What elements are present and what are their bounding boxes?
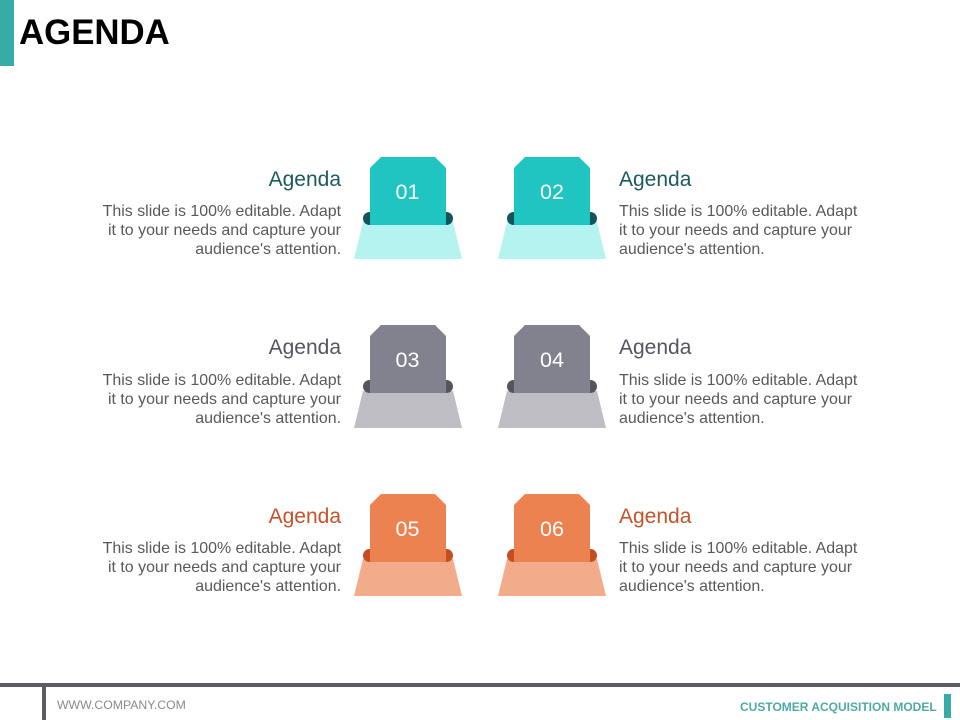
item 06 text: Agenda bbox=[619, 505, 692, 528]
item 03 text: it to your needs and capture your bbox=[108, 391, 342, 408]
footer deck name: CUSTOMER ACQUISITION MODEL bbox=[740, 700, 937, 714]
item 02 text: it to your needs and capture your bbox=[619, 222, 853, 239]
item 03 icon bbox=[354, 325, 462, 428]
item 03 text: Agenda bbox=[269, 336, 341, 359]
item 06 icon: 06 bbox=[540, 517, 564, 541]
item 01 icon: 01 bbox=[396, 180, 419, 204]
item 02 text: audience's attention. bbox=[619, 241, 765, 258]
item 04 text: it to your needs and capture your bbox=[619, 391, 853, 408]
item 01 text bbox=[103, 168, 342, 258]
item 06 icon bbox=[498, 494, 606, 596]
item 01 text: Agenda bbox=[269, 168, 341, 191]
item 03 text: This slide is 100% editable. Adapt bbox=[103, 372, 342, 389]
item 01 text: it to your needs and capture your bbox=[108, 222, 342, 239]
item 05 text: This slide is 100% editable. Adapt bbox=[103, 540, 342, 557]
footer left tick bbox=[42, 687, 46, 720]
item 04 text: Agenda bbox=[619, 336, 692, 359]
title: AGENDA bbox=[19, 13, 170, 52]
item 06 text: This slide is 100% editable. Adapt bbox=[619, 540, 858, 557]
item 04 icon: 04 bbox=[540, 348, 564, 372]
item 01 icon bbox=[354, 157, 462, 259]
item 04 icon bbox=[498, 325, 606, 428]
footer right accent bbox=[944, 694, 951, 718]
item 03 text bbox=[103, 336, 342, 427]
title accent bar bbox=[0, 0, 14, 66]
item 05 text: Agenda bbox=[269, 505, 341, 528]
item 05 icon: 05 bbox=[396, 517, 419, 541]
item 02 text: Agenda bbox=[619, 168, 692, 191]
item 03 text: audience's attention. bbox=[195, 410, 341, 427]
item 03 icon: 03 bbox=[396, 348, 419, 372]
footer rule bbox=[0, 683, 960, 687]
item 02 text bbox=[619, 168, 858, 258]
item 02 text: This slide is 100% editable. Adapt bbox=[619, 203, 858, 220]
item 01 text: audience's attention. bbox=[195, 241, 341, 258]
item 04 text bbox=[619, 336, 858, 427]
item 02 icon: 02 bbox=[540, 180, 564, 204]
item 06 text: it to your needs and capture your bbox=[619, 559, 853, 576]
item 05 text: it to your needs and capture your bbox=[108, 559, 342, 576]
item 04 text: audience's attention. bbox=[619, 410, 765, 427]
item 06 text bbox=[619, 505, 858, 595]
item 05 text bbox=[103, 505, 342, 595]
item 01 text: This slide is 100% editable. Adapt bbox=[103, 203, 342, 220]
item 05 icon bbox=[354, 494, 462, 596]
item 05 text: audience's attention. bbox=[195, 578, 341, 595]
item 02 icon bbox=[498, 157, 606, 259]
item 04 text: This slide is 100% editable. Adapt bbox=[619, 372, 858, 389]
footer website: WWW.COMPANY.COM bbox=[57, 698, 186, 712]
item 06 text: audience's attention. bbox=[619, 578, 765, 595]
